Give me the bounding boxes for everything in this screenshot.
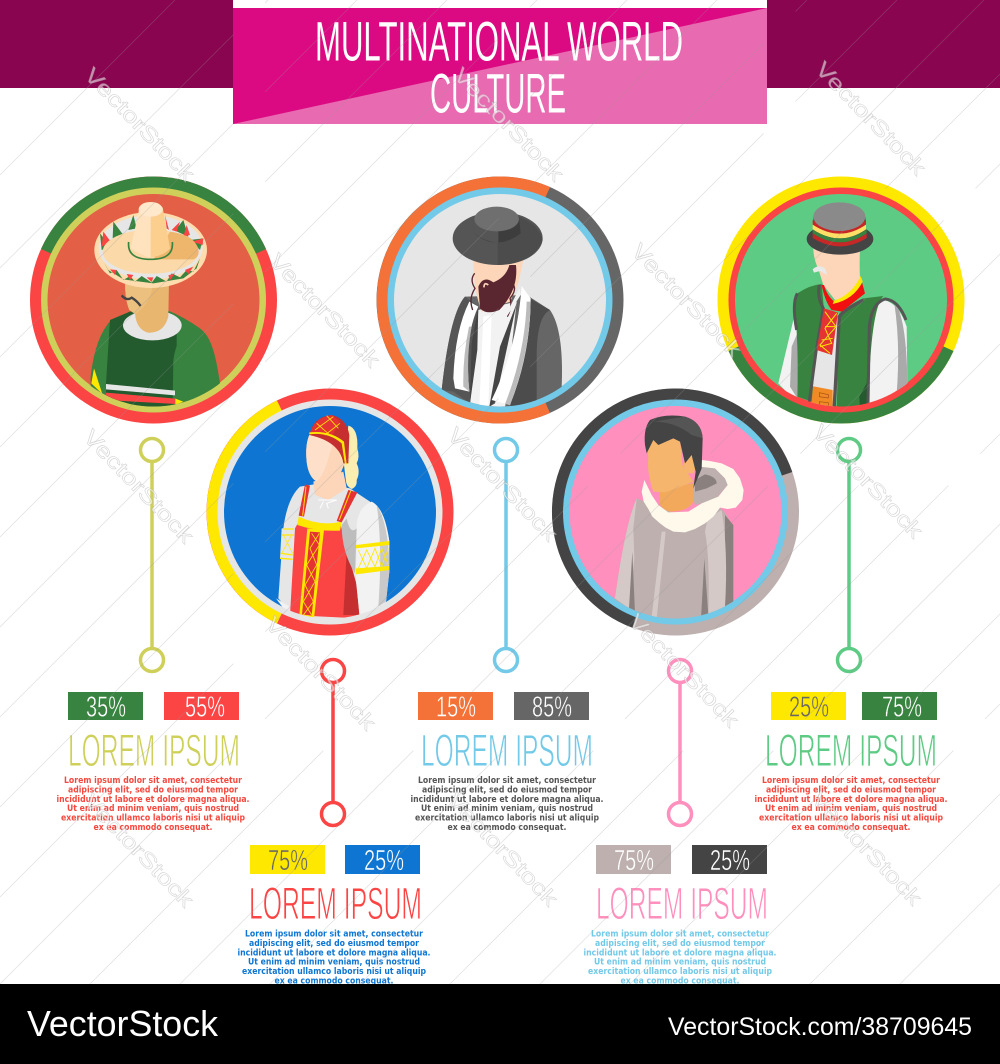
text block 1: 35% <box>86 692 126 724</box>
watermark text: VectorStock <box>264 249 384 372</box>
text block 5: adipiscing elit, sed do eiusmod tempor <box>595 938 766 948</box>
text block 2: Ut enim ad minim veniam, quis nostrud <box>421 803 593 813</box>
connector: red <box>322 660 344 826</box>
text block 4: LOREM IPSUM <box>249 878 422 929</box>
watermark text: VectorStock <box>78 425 198 548</box>
text block 2: Lorem ipsum dolor sit amet, consectetur <box>418 775 597 785</box>
watermark text: VectorStock <box>810 57 930 180</box>
text block 5: Ut enim ad minim veniam, quis nostrud <box>594 957 766 967</box>
text block 1: 55% <box>185 692 225 724</box>
medallion: woman in sarafan <box>206 388 454 636</box>
title banner: CULTURE <box>430 62 566 124</box>
text block 1: LOREM IPSUM <box>68 725 240 776</box>
text block 1 <box>56 692 250 832</box>
footer bar: VectorStock <box>27 1003 219 1044</box>
text block 4: Lorem ipsum dolor sit amet, consectetur <box>245 928 424 938</box>
text block 4: exercitation ullamco laboris nisi ut aliquip <box>242 966 426 976</box>
text block 5: exercitation ullamco laboris nisi ut aliquip <box>588 966 772 976</box>
text block 4: 25% <box>364 845 404 877</box>
text block 1: incididunt ut labore et dolore magna aliqua. <box>56 794 250 804</box>
text block 5: LOREM IPSUM <box>596 878 768 929</box>
text block 5: 25% <box>710 845 750 877</box>
connector: light blue <box>494 438 518 672</box>
text block 3: ex ea commodo consequat. <box>792 822 910 832</box>
text block 4: incididunt ut labore et dolore magna aliqua. <box>238 947 430 957</box>
text block 3: Lorem ipsum dolor sit amet, consectetur <box>762 775 941 785</box>
watermark text: VectorStock <box>260 612 380 735</box>
connector: green <box>838 438 860 672</box>
watermark text: VectorStock <box>623 609 743 732</box>
text block 2 <box>410 692 604 832</box>
text block 1: Lorem ipsum dolor sit amet, consectetur <box>64 775 243 785</box>
medallion: man in fur parka <box>552 388 799 636</box>
watermark text: VectorStock <box>442 788 562 911</box>
text block 4: adipiscing elit, sed do eiusmod tempor <box>249 938 420 948</box>
watermark text: VectorStock <box>806 787 926 910</box>
watermark text <box>78 57 930 912</box>
watermark text: VectorStock <box>442 423 562 546</box>
watermark text: VectorStock <box>78 789 198 912</box>
medallion: rabbi man <box>376 176 624 424</box>
watermark text: VectorStock <box>807 420 927 543</box>
watermark text: VectorStock <box>626 239 746 362</box>
text block 5: 75% <box>614 845 654 877</box>
text block 2: ex ea commodo consequat. <box>448 822 566 832</box>
text block 3: incididunt ut labore et dolore magna aliqua. <box>754 794 948 804</box>
title banner: MULTINATIONAL WORLD <box>315 10 683 72</box>
text block 2: LOREM IPSUM <box>421 725 593 776</box>
text block 1: exercitation ullamco laboris nisi ut aliquip <box>61 813 245 823</box>
text block 3: 25% <box>789 692 829 724</box>
footer bar <box>0 984 1000 1064</box>
medallion: folk costume man <box>718 176 964 424</box>
text block 5: ex ea commodo consequat. <box>620 976 740 986</box>
connector: olive <box>140 438 164 672</box>
connector: pink <box>668 660 692 826</box>
medallion: sombrero man <box>30 176 277 424</box>
text block 3: adipiscing elit, sed do eiusmod tempor <box>766 784 937 794</box>
text block 2: adipiscing elit, sed do eiusmod tempor <box>422 784 593 794</box>
watermark text: VectorStock <box>79 63 199 186</box>
text block 2: incididunt ut labore et dolore magna aliqua. <box>410 794 604 804</box>
text block 3 <box>754 692 948 832</box>
text block 5 <box>584 845 776 986</box>
text block 2: exercitation ullamco laboris nisi ut aliquip <box>415 813 599 823</box>
header band <box>0 0 1000 88</box>
text block 1: ex ea commodo consequat. <box>94 822 212 832</box>
text block 4: Ut enim ad minim veniam, quis nostrud <box>248 957 420 967</box>
text block 4 <box>238 845 430 986</box>
text block 3: Ut enim ad minim veniam, quis nostrud <box>765 803 937 813</box>
text block 2: 15% <box>436 692 476 724</box>
watermark text: VectorStock <box>448 63 568 186</box>
text block 3: 75% <box>882 692 922 724</box>
text block 1: Ut enim ad minim veniam, quis nostrud <box>67 803 239 813</box>
text block 5: Lorem ipsum dolor sit amet, consectetur <box>591 928 770 938</box>
text block 5: incididunt ut labore et dolore magna aliqua. <box>584 947 776 957</box>
text block 4: ex ea commodo consequat. <box>274 976 394 986</box>
text block 3: exercitation ullamco laboris nisi ut aliquip <box>759 813 943 823</box>
text block 4: 75% <box>268 845 308 877</box>
footer bar: VectorStock.com/38709645 <box>668 1013 972 1041</box>
title banner <box>233 8 767 124</box>
text block 2: 85% <box>532 692 572 724</box>
text block 1: adipiscing elit, sed do eiusmod tempor <box>68 784 239 794</box>
